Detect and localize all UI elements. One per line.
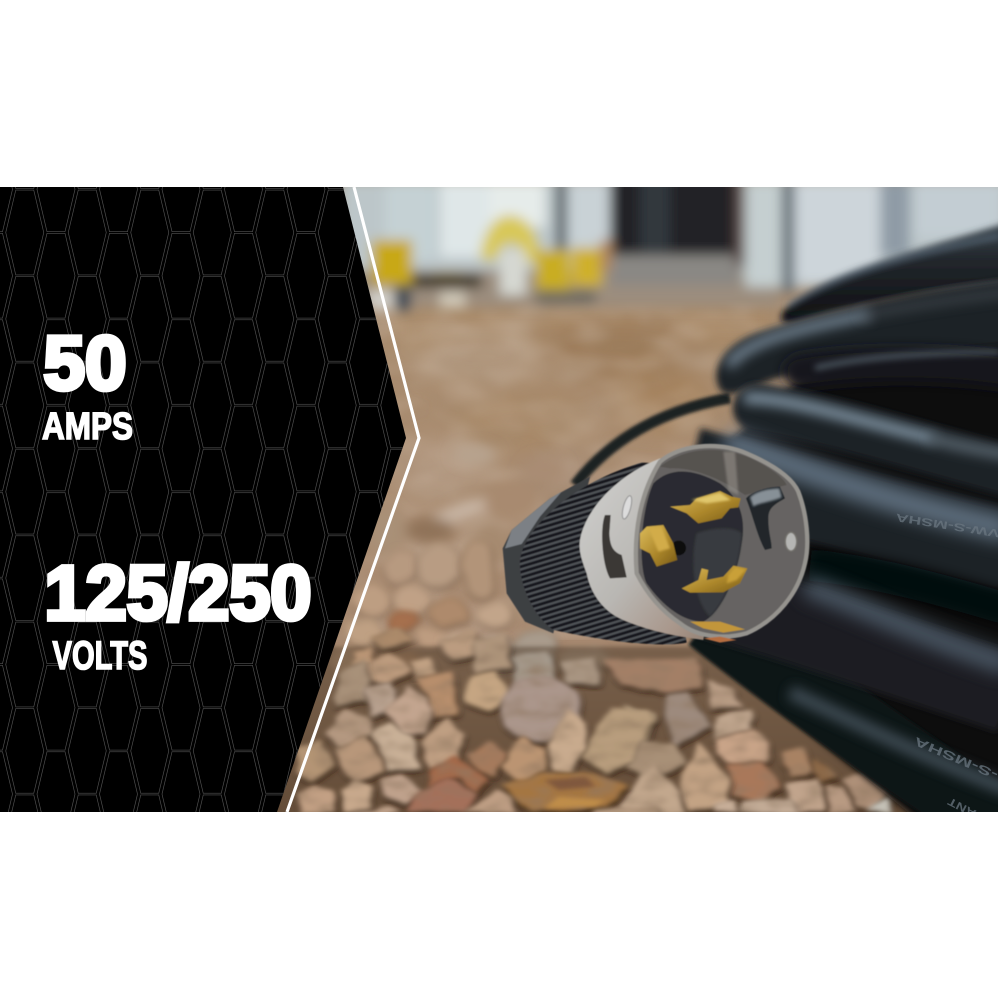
cable A (781, 222, 1000, 324)
photo: blurred background with yellow equipment (340, 175, 1000, 310)
hexagon pattern (0, 187, 410, 812)
photo: far gravel (378, 442, 564, 546)
plug: silver barrel (578, 458, 704, 640)
cable jacket printing: VW-S-MSHA (895, 511, 1000, 539)
plug: dark insulator (642, 471, 743, 622)
spec: 50 amps (42, 322, 133, 448)
cable jacket printing: -S-MSHA (911, 734, 1000, 782)
plug: rivet (785, 532, 797, 551)
photo: foreground stones (261, 627, 1000, 820)
photo: blurred gravel ground (270, 187, 1000, 812)
cable F (700, 585, 1000, 694)
plug: bottom prong (690, 622, 745, 643)
photo: mid-distance gravel (329, 542, 609, 678)
photo: cable coil and plug on gravel (261, 175, 1000, 830)
cable B (716, 279, 1000, 394)
cable E (690, 440, 1000, 610)
coil shadow mass (720, 330, 1000, 830)
cables: coil stack (690, 222, 1000, 830)
white chevron line (287, 187, 419, 812)
cable: thin rear lead (575, 398, 730, 485)
cable jacket printing: ANT (946, 795, 978, 819)
plug: top prong (670, 491, 741, 523)
panel: black hexagon specification panel (0, 187, 410, 812)
value: 125/250: 125/250 (44, 550, 312, 636)
spec: 125/250 volts (44, 550, 312, 678)
plug: barrel slot (602, 515, 627, 578)
cable jacket printing (895, 511, 1000, 819)
plug: connector (503, 446, 807, 645)
plug: inner face (636, 446, 807, 637)
plug: left prong (640, 525, 677, 567)
plug: ribbed grip (520, 463, 687, 645)
plug: upper shell (660, 450, 787, 495)
unit: amps: AMPS (42, 406, 133, 448)
cable G (686, 636, 998, 812)
plug: right prong (682, 566, 747, 593)
plug: barrel hole (622, 495, 632, 520)
plug: collar (503, 477, 590, 633)
plug: locking notch (746, 487, 785, 550)
cable D (748, 398, 1000, 472)
unit: volts: VOLTS (52, 634, 148, 678)
value: 50: 50 (44, 322, 126, 407)
plug: rim (636, 446, 807, 637)
cable C (800, 352, 1000, 372)
